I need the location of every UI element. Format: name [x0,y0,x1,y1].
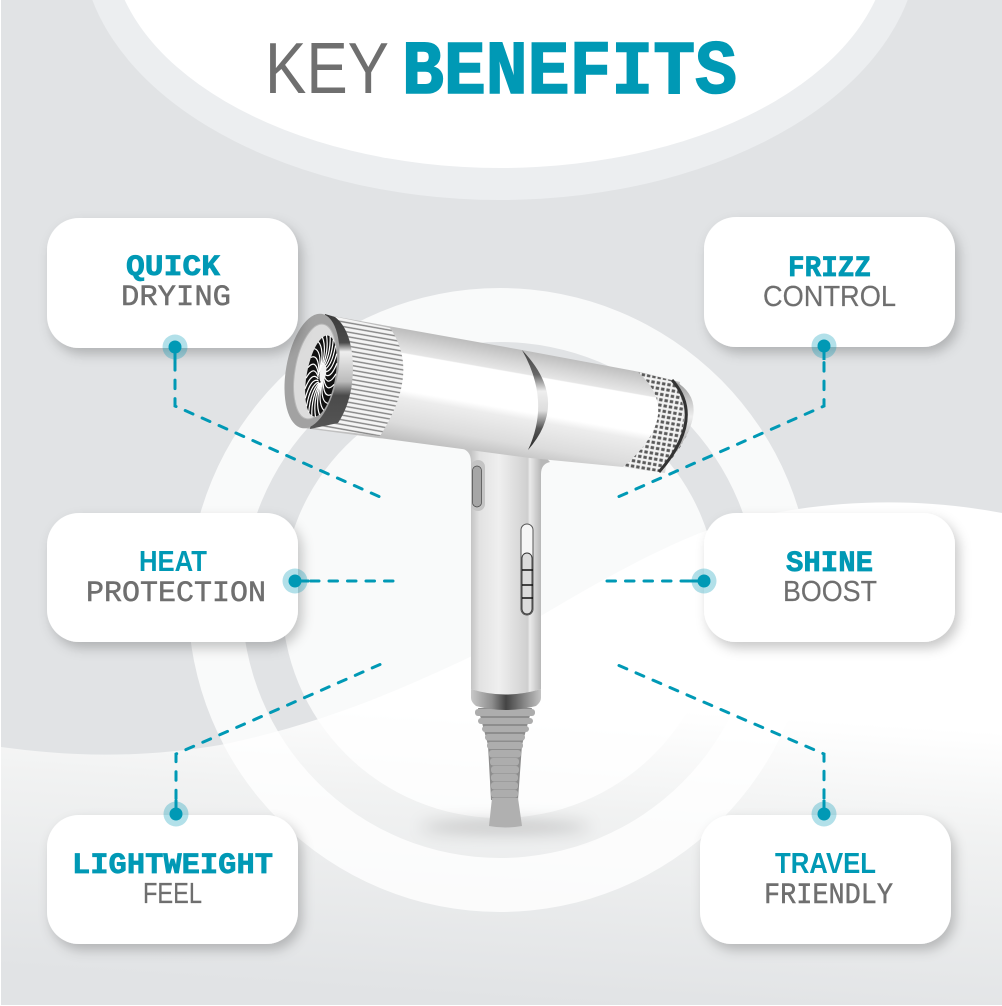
card: heat protection [47,513,298,642]
marker: heat protection [282,568,309,594]
marker: quick drying [162,334,188,361]
hose [475,708,535,828]
card: travel friendly: FRIENDLY [764,879,893,913]
floor shadow [420,821,590,833]
marker: frizz control [812,334,836,360]
card: shine boost: BOOST [783,576,877,608]
card: heat protection: HEAT [139,546,207,578]
card: quick drying [47,218,298,348]
collar [471,689,541,710]
hair dryer illustration [276,309,694,827]
connector lines [175,346,824,814]
card: quick drying: DRYING [121,281,231,315]
ribbed section [303,315,403,436]
card: frizz control [704,217,955,347]
front chrome band [310,314,353,429]
card: lightweight feel: FEEL [143,878,202,910]
card: frizz control: CONTROL [763,281,896,313]
card: shine boost: SHINE [786,547,873,581]
rear rim [659,380,694,472]
card: heat protection: PROTECTION [86,577,266,611]
rear mesh [623,372,692,472]
card: frizz control: FRIZZ [788,252,871,286]
card: shine boost [704,513,955,642]
marker: travel friendly [812,800,836,826]
card: travel friendly [700,815,951,944]
rear barrel [522,350,680,473]
card: travel friendly: TRAVEL [775,848,876,880]
card: lightweight feel: LIGHTWEIGHT [72,849,273,883]
front barrel [303,315,541,458]
power button [471,460,485,511]
title [265,29,737,116]
title: KEY [265,29,389,109]
speed slider [521,524,533,615]
marker: lightweight feel [164,800,188,826]
card: quick drying: QUICK [126,251,220,285]
nozzle face [276,309,348,433]
handle [460,440,550,694]
fan [299,332,343,420]
marker: shine boost [690,568,716,594]
chrome ring [522,350,548,450]
card: lightweight feel [47,815,298,944]
title: BENEFITS [402,30,737,116]
